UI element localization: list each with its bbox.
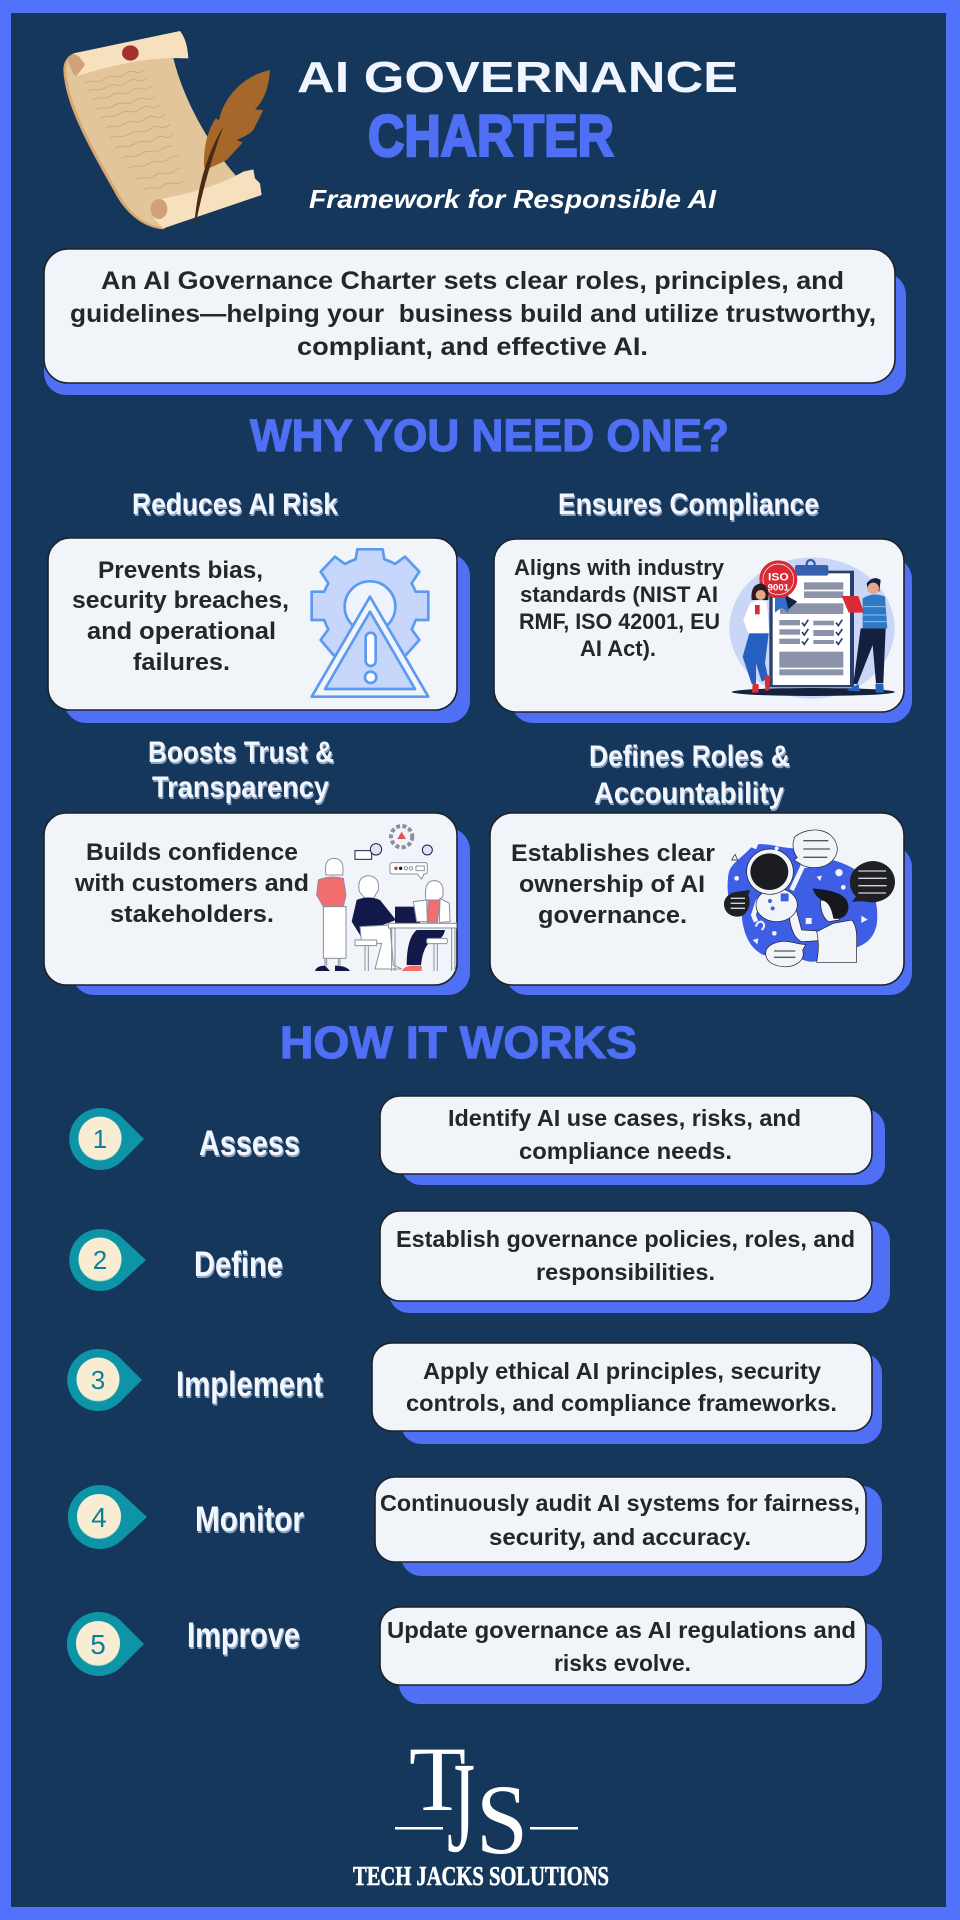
- step 4: monitor: [68, 1477, 882, 1576]
- marker 4: 4: [91, 1502, 107, 1533]
- text: implement: [406, 1358, 837, 1416]
- heading: boosts trust: Boosts Trust &: [148, 736, 334, 769]
- label: monitor: Monitor: [195, 1500, 304, 1539]
- panel: boosts trust and transparency: [44, 736, 470, 995]
- step 3: implement: [67, 1343, 882, 1444]
- text: boosts trust: stakeholders.: [110, 901, 274, 928]
- step 5: improve: [67, 1607, 882, 1704]
- text: reduces AI risk: security breaches,: [72, 587, 289, 614]
- icon: parchment scroll and quill: [63, 31, 270, 229]
- icon: astronaut and person with speech bubbles: [724, 830, 895, 967]
- text: defines roles: governance.: [538, 902, 687, 929]
- heading: boosts trust: Transparency: [152, 771, 329, 804]
- marker 5: 5: [90, 1629, 106, 1660]
- text: define: Establish governance policies, roles, and: [396, 1226, 855, 1252]
- text: assess: Identify AI use cases, risks, and: [448, 1105, 801, 1131]
- marker 1: [69, 1108, 144, 1170]
- text: improve: [387, 1617, 856, 1676]
- icon: ISO checklist with two people: ISO: [768, 572, 789, 584]
- logo: tech jacks solutions: TECH JACKS SOLUTIONS: [353, 1861, 609, 1891]
- text: improve: risks evolve.: [554, 1650, 691, 1676]
- marker 2: [69, 1229, 146, 1291]
- text: boosts trust: [74, 839, 309, 928]
- text: improve: Update governance as AI regulations and: [387, 1617, 856, 1643]
- text: defines roles: Establishes clear: [511, 840, 715, 867]
- marker 3: [67, 1349, 142, 1411]
- logo: tech jacks solutions: T: [409, 1728, 466, 1830]
- panel: reduces AI risk: [48, 488, 470, 723]
- heading: how it works: HOW IT WORKS: [280, 1017, 637, 1068]
- panel: defines roles and accountability: [490, 740, 912, 995]
- marker 4: [68, 1485, 147, 1549]
- text: ensures compliance: RMF, ISO 42001, EU: [519, 609, 720, 634]
- heading: boosts trust: [148, 736, 334, 804]
- logo: tech jacks solutions: S: [476, 1764, 528, 1875]
- panel: intro definition: An AI Governance Charter sets clear roles, principles, and: [101, 267, 844, 295]
- label: define: Define: [194, 1245, 283, 1284]
- heading: defines roles: Accountability: [594, 777, 784, 810]
- label: assess: Assess: [199, 1124, 300, 1163]
- step 1: assess: [69, 1096, 885, 1185]
- text: define: [396, 1226, 855, 1285]
- text: defines roles: [511, 840, 715, 929]
- text: implement: controls, and compliance frameworks.: [406, 1390, 837, 1416]
- text: monitor: security, and accuracy.: [489, 1524, 751, 1550]
- label: improve: Improve: [187, 1616, 300, 1655]
- logo: tech jacks solutions: [353, 1728, 609, 1891]
- text: ensures compliance: Aligns with industry: [514, 555, 725, 580]
- text: assess: compliance needs.: [519, 1138, 732, 1164]
- text: reduces AI risk: Prevents bias,: [98, 557, 263, 584]
- panel: intro definition: guidelines—helping your business build and utilize trustworthy,: [70, 300, 876, 328]
- text: boosts trust: with customers and: [74, 870, 309, 897]
- text: implement: Apply ethical AI principles, security: [423, 1358, 821, 1384]
- text: monitor: [380, 1490, 860, 1550]
- marker 3: 3: [91, 1365, 105, 1395]
- panel: ensures compliance: [494, 488, 912, 723]
- panel: intro definition: compliant, and effective AI.: [297, 333, 648, 361]
- text: ensures compliance: [514, 555, 725, 661]
- heading: why you need one: WHY YOU NEED ONE?: [250, 410, 729, 461]
- heading: ensures compliance: Ensures Compliance: [558, 488, 819, 521]
- text: ensures compliance: AI Act).: [580, 636, 656, 661]
- marker 1: 1: [93, 1124, 107, 1154]
- text: monitor: Continuously audit AI systems for fairness,: [380, 1490, 860, 1516]
- icon: gear with warning triangle: [312, 549, 428, 697]
- title: CHARTER: [368, 104, 614, 169]
- marker 2: 2: [93, 1245, 107, 1275]
- title: [297, 53, 738, 214]
- text: boosts trust: Builds confidence: [86, 839, 298, 866]
- icon: ISO checklist with two people: 9001: [768, 583, 789, 593]
- icon: ISO checklist with two people: [729, 557, 895, 699]
- text: reduces AI risk: and operational: [87, 618, 276, 645]
- title: AI GOVERNANCE: [297, 53, 738, 102]
- text: assess: [448, 1105, 801, 1164]
- text: defines roles: ownership of AI: [519, 871, 705, 898]
- panel: intro definition: [44, 249, 906, 395]
- marker 5: [67, 1612, 144, 1676]
- text: reduces AI risk: failures.: [133, 649, 230, 676]
- label: implement: Implement: [176, 1365, 323, 1404]
- heading: reduces AI risk: Reduces AI Risk: [132, 488, 338, 521]
- logo: tech jacks solutions: J: [447, 1736, 475, 1880]
- heading: defines roles: Defines Roles &: [589, 740, 790, 773]
- icon: people meeting at table: [315, 826, 457, 971]
- title: Framework for Responsible AI: [309, 184, 717, 214]
- heading: defines roles: [589, 740, 790, 810]
- text: ensures compliance: standards (NIST AI: [520, 582, 718, 607]
- text: define: responsibilities.: [536, 1259, 715, 1285]
- text: reduces AI risk: [72, 557, 289, 676]
- step 2: define: [69, 1211, 890, 1313]
